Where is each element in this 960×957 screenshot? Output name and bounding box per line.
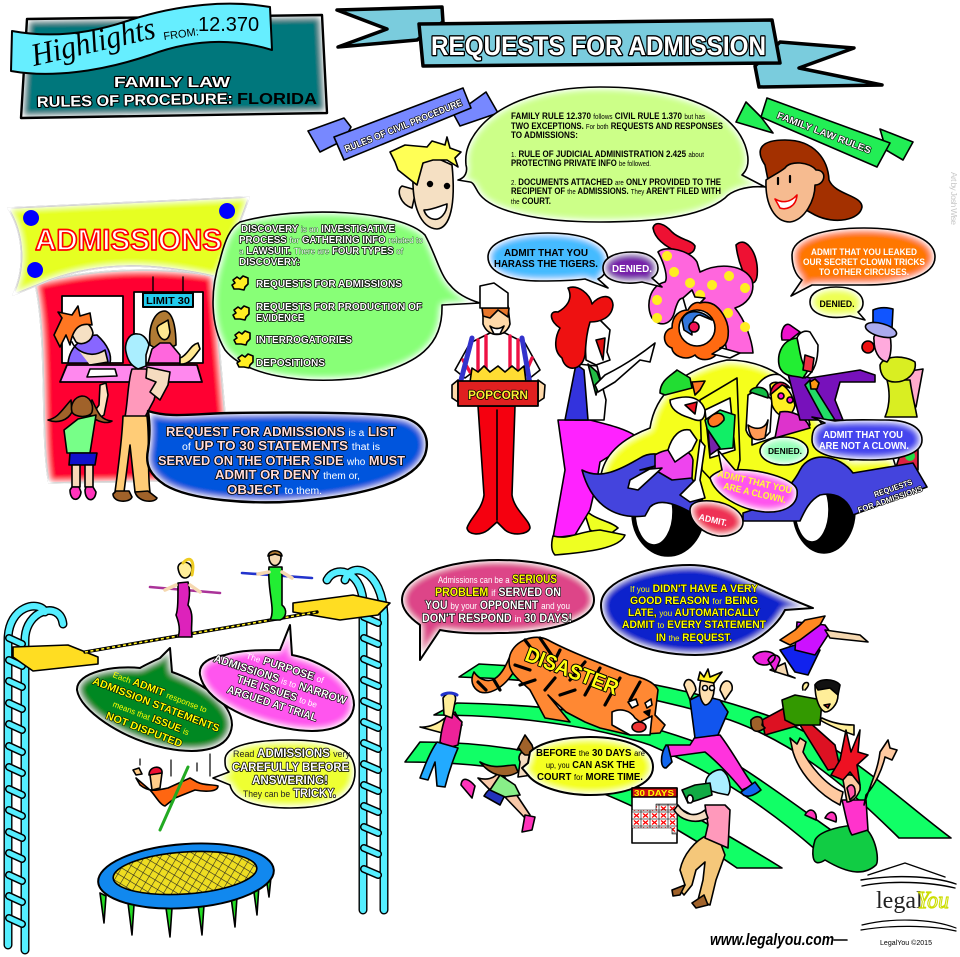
speech bubble: ask for more time: BEFORE the 30 DAYS are bbox=[536, 748, 645, 759]
plate text: REQUESTS bbox=[873, 478, 914, 499]
tightrope bbox=[85, 612, 317, 652]
bubble text: RECIPIENT OF the ADMISSIONS. They AREN'T FILED WITH bbox=[511, 186, 721, 196]
character: rooster haired ringmaster bbox=[551, 287, 655, 555]
speech bubble: read carefully: ANSWERING! bbox=[252, 775, 328, 787]
bubble line two: HARASS THE TIGERS. bbox=[494, 258, 598, 270]
definition text: of UP TO 30 STATEMENTS that is bbox=[182, 439, 380, 453]
discovery paragraph: DISCOVERY is an INVESTIGATIVE bbox=[241, 224, 395, 235]
illustration: left ladder and platform bbox=[8, 606, 98, 950]
ribbon: rules of civil procedure: RULES OF CIVIL PROCEDURE bbox=[343, 98, 464, 155]
booth body bbox=[35, 270, 225, 483]
speech bubble: purpose of admissions: ADMISSIONS is to NARROW bbox=[212, 653, 349, 707]
speech bubble: purpose of admissions: THE ISSUES to be bbox=[235, 673, 319, 711]
yellow shoes bbox=[582, 505, 618, 538]
illustration: clown car bbox=[582, 360, 927, 556]
clerk: woman bbox=[148, 311, 200, 364]
speech bubble: admit you are a clown bbox=[710, 450, 797, 512]
speech bubble: ask for more time: COURT for MORE TIME. bbox=[537, 772, 643, 783]
sign text: ADMISSIONS bbox=[35, 224, 222, 257]
speech bubble: civil and family rule exceptions bbox=[458, 87, 765, 222]
white shirt bbox=[575, 364, 606, 420]
speech bubble: not a clown: ADMIT THAT YOU bbox=[823, 429, 903, 441]
speech bubble: serious problem: PROBLEM if SERVED ON bbox=[435, 587, 561, 599]
calendar: 30 days bbox=[632, 788, 677, 843]
definition text bbox=[158, 425, 405, 497]
door and windows bbox=[700, 378, 740, 500]
rear tail light bbox=[895, 440, 918, 470]
speech bubble: automatic admission: LATE, you AUTOMATICALLY bbox=[628, 607, 761, 619]
speech bubble: admit: ADMIT. bbox=[698, 512, 728, 528]
speech bubble: discovery explanation bbox=[213, 212, 480, 380]
speech bubble: read carefully bbox=[213, 740, 355, 808]
line two: OUR SECRET CLOWN TRICKS bbox=[803, 257, 925, 268]
ribbon: family law rules: FAMILY LAW RULES bbox=[775, 110, 872, 157]
heading: rules of procedure: RULES OF PROCEDURE: bbox=[37, 91, 233, 111]
text: rule number: 12.370 bbox=[198, 14, 259, 36]
speech bubble: automatic admission: IN the REQUEST. bbox=[656, 632, 732, 644]
discovery list: EVIDENCE bbox=[256, 313, 304, 324]
customer: little girl bbox=[48, 383, 112, 500]
speech bubble: admit means not disputed: Each ADMIT response to bbox=[111, 668, 209, 716]
speech bubble: denied purple bbox=[603, 252, 662, 287]
character: brunette woman bbox=[760, 140, 862, 222]
definition text: OBJECT to them. bbox=[227, 483, 322, 497]
hat bbox=[480, 283, 508, 308]
arm bbox=[595, 343, 655, 392]
car body bbox=[599, 360, 900, 520]
character: man in green shirt bbox=[751, 680, 854, 770]
speech bubble: purpose of admissions: ARGUED AT TRIAL bbox=[225, 684, 319, 724]
clown with ruffle bbox=[655, 449, 693, 480]
ribbon: family law rules bbox=[736, 98, 913, 167]
definition text: ADMIT OR DENY them or, bbox=[215, 468, 360, 482]
acrobat: green bbox=[242, 551, 312, 620]
speech bubble: automatic admission: GOOD REASON for BEING bbox=[630, 595, 758, 607]
speech bubble: read carefully: They can be TRICKY. bbox=[243, 788, 336, 800]
speech bubble: purpose of admissions: The PURPOSE of bbox=[245, 650, 326, 686]
character: running girl bbox=[461, 735, 538, 832]
speech bubble: leaked clown tricks: ADMIT THAT YOU LEAKED bbox=[811, 247, 917, 258]
sign dots bbox=[23, 203, 235, 278]
bubble text: TWO EXCEPTIONS. For both REQUESTS AND RESPONSES bbox=[511, 121, 723, 131]
illustration: admissions booth bbox=[8, 197, 249, 501]
orange hair bbox=[664, 302, 728, 360]
stripes bbox=[478, 638, 640, 705]
plate text line two: FOR ADMISSIONS bbox=[857, 484, 924, 515]
logo: legal you bbox=[861, 863, 956, 947]
speech bubble: automatic admission bbox=[601, 565, 813, 655]
right platform bbox=[293, 595, 390, 620]
head bbox=[483, 306, 510, 334]
discovery list: REQUESTS FOR ADMISSIONS bbox=[256, 279, 402, 290]
speech bubble: denied purple: DENIED. bbox=[612, 264, 652, 275]
speech bubble: admit means not disputed: means that ISSUE is bbox=[111, 698, 191, 738]
title banner bbox=[337, 7, 882, 87]
popcorn bbox=[470, 366, 526, 382]
text: Highlights: Highlights bbox=[27, 9, 158, 73]
calendar: 30 days: 30 DAYS bbox=[634, 789, 675, 798]
character: popcorn vendor: POPCORN bbox=[468, 388, 528, 402]
speech bubble: purpose of admissions bbox=[200, 625, 354, 731]
acrobat: magenta bbox=[150, 559, 220, 637]
bubble text: PROTECTING PRIVATE INFO be followed. bbox=[511, 158, 651, 168]
illustration: right ladder and platform bbox=[293, 570, 390, 910]
discovery paragraph: a LAWSUIT. There are FOUR TYPES of bbox=[239, 246, 404, 257]
counter bbox=[60, 365, 202, 382]
credit: art by Josh Wise: Art by Josh Wise bbox=[949, 172, 959, 225]
speech bubble: serious problem: YOU by your OPPONENT and you bbox=[425, 600, 570, 612]
red hair bbox=[551, 287, 613, 368]
speech bubble: admit means not disputed: NOT DISPUTED bbox=[104, 710, 184, 750]
title text: REQUESTS FOR ADMISSION bbox=[431, 31, 766, 61]
speech bubble: request for admissions definition bbox=[147, 411, 427, 502]
discovery paragraph bbox=[239, 224, 423, 268]
body bbox=[509, 637, 665, 735]
admissions sign bbox=[8, 197, 249, 295]
speech bubble: ask for more time: up, you CAN ASK THE bbox=[546, 760, 635, 771]
illustration: tiger bbox=[472, 637, 665, 735]
passengers bbox=[705, 410, 735, 450]
popcorn box bbox=[458, 381, 538, 406]
crosswalk stripes bbox=[405, 664, 951, 868]
speech bubble: read carefully: Read ADMISSIONS very bbox=[233, 748, 351, 760]
speech bubble: automatic admission: If you DIDN'T HAVE A VERY bbox=[630, 583, 759, 595]
disaster label: DISASTER bbox=[522, 643, 622, 700]
bubble text: FAMILY RULE 12.370 follows CIVIL RULE 1.370 but has bbox=[511, 111, 705, 121]
ribbon: highlights bbox=[11, 4, 272, 74]
speech bubble: serious problem: DON'T RESPOND in 30 DAYS! bbox=[422, 613, 572, 625]
speech bubble: denied yellow: DENIED. bbox=[820, 299, 854, 310]
heading: florida: FLORIDA bbox=[237, 91, 317, 108]
discovery paragraph: PROCESS for GATHERING INFO related to bbox=[239, 235, 423, 246]
tail bbox=[472, 656, 516, 693]
speech bubble: not a clown bbox=[812, 417, 922, 460]
logo: legal you: legal bbox=[876, 888, 923, 914]
speech bubble: admit means not disputed: ADMISSION STATEMENTS bbox=[91, 675, 221, 735]
character: flying person bbox=[753, 616, 868, 678]
speech bubble: ask for more time bbox=[522, 737, 653, 795]
discovery list: DEPOSITIONS bbox=[256, 358, 325, 369]
panel: highlights header bbox=[11, 4, 327, 118]
character: blue trousered woman bbox=[420, 693, 462, 787]
logo: legal you: You bbox=[917, 888, 949, 914]
speech bubble: admit means not disputed bbox=[77, 648, 232, 751]
discovery list: REQUESTS FOR PRODUCTION OF bbox=[256, 302, 422, 313]
character: woman with binoculars bbox=[672, 770, 730, 908]
heading: family law: FAMILY LAW bbox=[114, 74, 231, 91]
line two: ARE A CLOWN. bbox=[722, 481, 787, 506]
speech bubble: leaked clown tricks bbox=[791, 228, 935, 296]
line two: ARE NOT A CLOWN. bbox=[819, 440, 909, 452]
definition text: REQUEST FOR ADMISSIONS is a LIST bbox=[166, 425, 396, 439]
face bbox=[584, 320, 610, 365]
text: from: FROM: bbox=[163, 26, 200, 43]
character: popcorn vendor bbox=[452, 283, 545, 534]
bubble text: TO ADMISSIONS: bbox=[511, 130, 578, 140]
character: falling acrobat bbox=[133, 754, 218, 830]
discovery list: INTERROGATORIES bbox=[256, 335, 352, 346]
logo: legal you: LegalYou ©2015 bbox=[880, 939, 932, 947]
limit sign: LIMIT 30 bbox=[146, 296, 190, 307]
line three: TO OTHER CIRCUSES. bbox=[819, 267, 909, 278]
speech bubble: automatic admission: ADMIT to EVERY STATEMENT bbox=[622, 619, 766, 631]
legs bbox=[467, 406, 530, 534]
bubble text: 2. DOCUMENTS ATTACHED are ONLY PROVIDED TO THE bbox=[511, 177, 721, 187]
speech bubble: denied green bbox=[760, 437, 808, 465]
hands bbox=[452, 380, 545, 402]
character: green haired clown bbox=[779, 324, 875, 420]
bubble text: the COURT. bbox=[511, 196, 551, 206]
illustration: trampoline bbox=[96, 838, 276, 937]
clerk: bored man bbox=[54, 306, 110, 365]
striped shirt bbox=[455, 333, 540, 383]
character: blue hat clown bbox=[862, 308, 923, 417]
speech bubble: denied yellow bbox=[810, 287, 865, 320]
limit sign bbox=[143, 277, 193, 307]
definition text: SERVED ON THE OTHER SIDE who MUST bbox=[158, 454, 405, 468]
fenders bbox=[582, 454, 700, 518]
character: blond man bbox=[390, 137, 461, 229]
speech bubble: serious problem: Admissions can be a SERIOUS bbox=[438, 574, 557, 586]
left platform bbox=[13, 645, 98, 671]
character: upside down clown bbox=[649, 224, 757, 360]
speech bubble: harass the tigers: ADMIT THAT YOU bbox=[504, 247, 588, 259]
speech bubble: admit bbox=[690, 501, 743, 536]
speech bubble: read carefully: CAREFULLY BEFORE bbox=[232, 762, 349, 774]
ribbon: rules of civil procedure bbox=[308, 88, 498, 160]
customer: blue haired woman bbox=[113, 334, 170, 501]
character: screaming woman in green bbox=[790, 730, 897, 872]
wheels bbox=[632, 470, 704, 556]
vest bbox=[565, 364, 588, 420]
pink trousers bbox=[553, 420, 638, 538]
bubble text bbox=[511, 111, 723, 206]
character: runner in blue bbox=[662, 669, 761, 796]
discovery paragraph: DISCOVERY: bbox=[239, 257, 300, 268]
face bbox=[612, 710, 652, 735]
booth windows bbox=[62, 292, 203, 363]
clown leaning out bbox=[670, 397, 705, 420]
website address: www.legalyou.com bbox=[710, 930, 834, 949]
speech bubble: admit you are a clown: ADMIT THAT YOU bbox=[716, 469, 793, 496]
bubble text: 1. RULE OF JUDICIAL ADMINISTRATION 2.425 about bbox=[511, 149, 704, 159]
discovery list bbox=[232, 276, 422, 369]
speech bubble: harass the tigers bbox=[488, 233, 608, 288]
speech bubble: denied green: DENIED. bbox=[768, 446, 802, 456]
speech bubble: serious problem bbox=[402, 560, 594, 660]
